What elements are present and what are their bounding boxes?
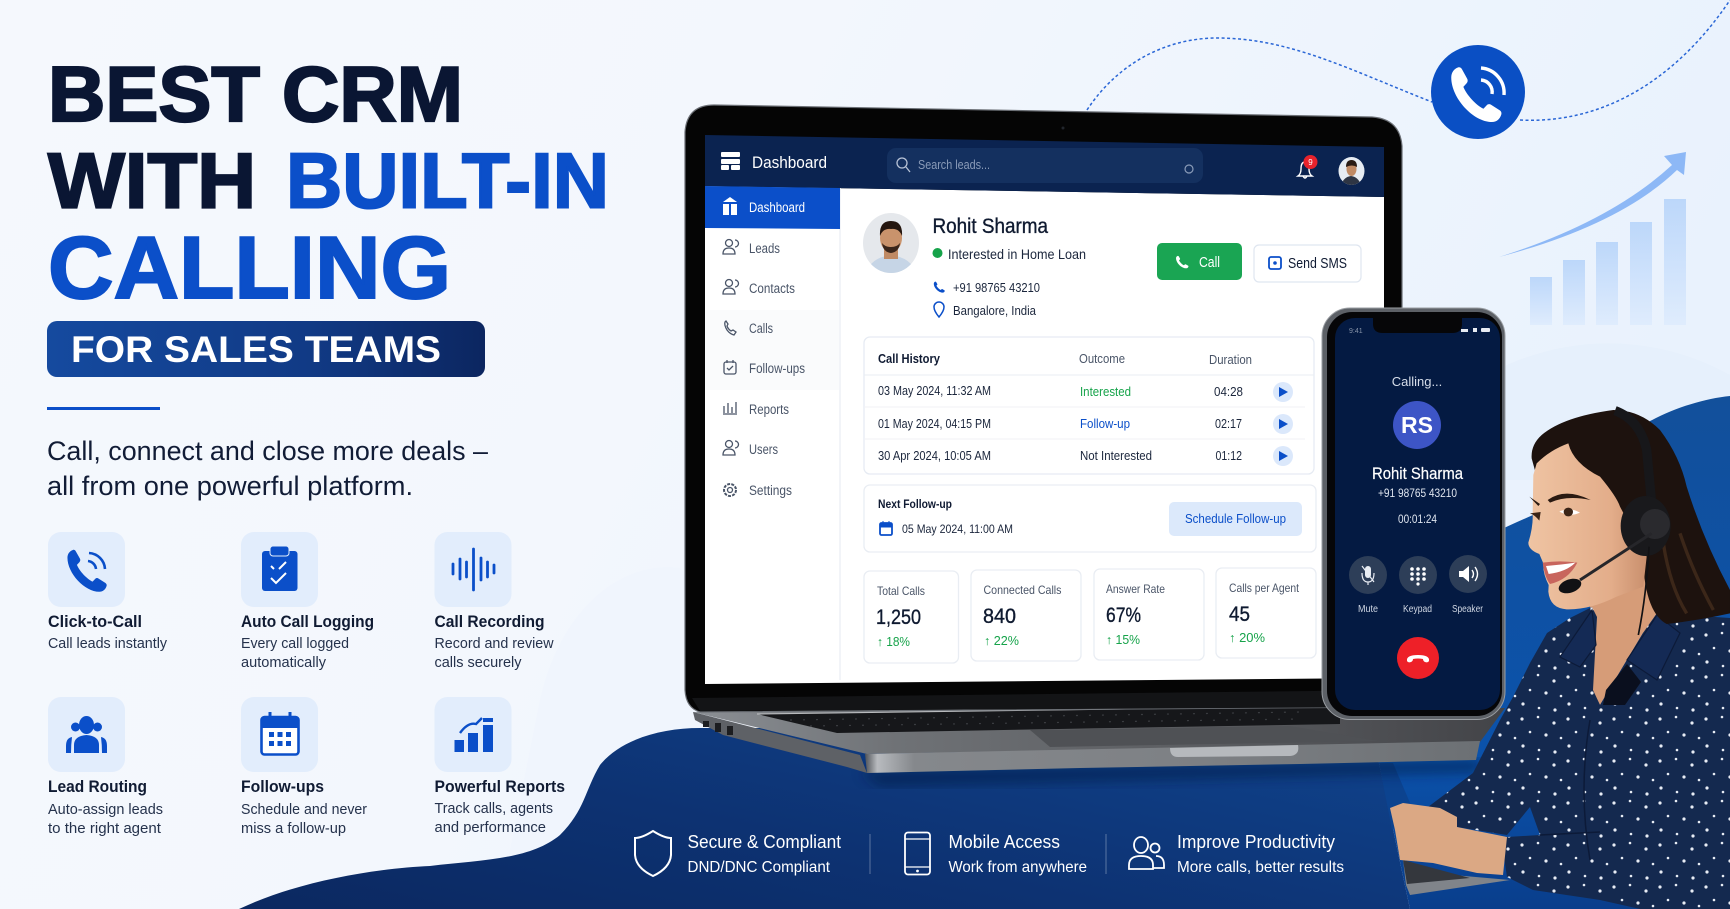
feature: Follow-ups: Follow-ups	[241, 777, 324, 796]
tagline: all from one powerful platform.	[47, 471, 413, 501]
call history table	[864, 337, 1314, 474]
icon: dashboard	[723, 197, 737, 215]
shirt collar and folds	[1540, 610, 1680, 860]
call history table: 01:12	[1216, 449, 1242, 463]
title: BUILT-IN	[286, 136, 609, 224]
laptop deck	[693, 708, 1505, 754]
call history table: Follow-up	[1080, 417, 1130, 431]
feature: Auto Call Logging	[241, 532, 374, 671]
feature: Follow-ups	[241, 697, 367, 837]
user avatar small	[1338, 157, 1365, 186]
sidebar	[705, 186, 840, 680]
sidebar: Calls	[749, 321, 773, 336]
smartphone: 9:41	[1349, 328, 1363, 335]
title: WITH	[48, 136, 256, 224]
smartphone: Calling...	[1392, 374, 1442, 389]
stat card: total calls: Total Calls	[877, 584, 925, 598]
stat card: calls per agent: ↑ 20%	[1229, 631, 1265, 645]
feature: Follow-ups: miss a follow-up	[241, 820, 346, 837]
search bar	[887, 148, 1203, 183]
call history table: Call History	[878, 351, 941, 366]
call history table: 03 May 2024, 11:32 AM	[878, 384, 991, 398]
laptop	[685, 105, 1505, 786]
feature: Click-to-Call	[48, 532, 167, 652]
subtitle pill: FOR SALES TEAMS	[71, 329, 441, 370]
eyebrows, eyes and smile	[1529, 494, 1591, 584]
call button: Call	[1199, 254, 1220, 271]
subtitle pill	[47, 321, 485, 377]
footer benefit: secure and compliant: Secure & Compliant	[688, 832, 841, 852]
app header	[705, 135, 1384, 197]
icon: floating phone badge	[1431, 45, 1525, 139]
send sms button: Send SMS	[1288, 256, 1347, 272]
footer benefit: mobile access	[905, 832, 1087, 876]
agent with headset	[1390, 410, 1730, 909]
sidebar: Leads	[749, 241, 780, 256]
footer benefit: mobile access: Mobile Access	[948, 832, 1060, 852]
footer benefit: improve productivity: Improve Productivity	[1177, 832, 1335, 852]
feature: Auto Call Logging: Auto Call Logging	[241, 612, 374, 631]
tagline: Call, connect and close more deals –	[47, 436, 488, 466]
feature: Call Recording: Call Recording	[434, 612, 544, 631]
laptop: Dashboard	[752, 153, 827, 172]
mute button: Mute	[1358, 604, 1378, 615]
laptop lid	[685, 105, 1402, 712]
next follow-up card: Schedule Follow-up	[1185, 512, 1286, 526]
feature: Follow-ups: Schedule and never	[241, 801, 367, 818]
lead portrait	[863, 213, 919, 275]
footer benefit: mobile access: Work from anywhere	[948, 859, 1087, 876]
sidebar: Contacts	[749, 281, 795, 296]
stat card: total calls: ↑ 18%	[877, 635, 910, 649]
head	[1528, 410, 1730, 635]
wave: light blue panel behind agent	[1379, 396, 1730, 909]
call history table: Interested	[1080, 385, 1131, 399]
lead profile: Interested in Home Loan	[948, 246, 1086, 262]
sidebar: Reports	[749, 402, 789, 417]
smartphone: 00:01:24	[1398, 512, 1437, 526]
search bar: Search leads...	[918, 157, 990, 172]
shirt	[1428, 607, 1730, 909]
feature: Powerful Reports: and performance	[434, 819, 546, 836]
caller initials: RS	[1401, 412, 1433, 438]
keypad button	[1399, 556, 1437, 615]
lead profile: Bangalore, India	[953, 303, 1037, 318]
call button	[1157, 243, 1242, 280]
hand	[1390, 803, 1507, 875]
stat card: calls per agent: Calls per Agent	[1229, 581, 1300, 595]
feature: Lead Routing	[48, 697, 163, 837]
caller initials	[1393, 401, 1441, 449]
stat card: calls per agent	[1216, 568, 1316, 658]
call history table: Outcome	[1079, 352, 1125, 366]
stat card: calls per agent: 45	[1229, 603, 1250, 626]
feature: Call Recording: calls securely	[434, 654, 522, 671]
lead profile	[863, 213, 1086, 318]
speaker button	[1449, 555, 1487, 615]
send sms button	[1254, 245, 1361, 282]
lead profile: +91 98765 43210	[953, 280, 1040, 295]
call history table: 04:28	[1214, 385, 1243, 399]
screen	[705, 186, 1384, 684]
call history table: Not Interested	[1080, 449, 1152, 463]
mute button	[1349, 556, 1387, 615]
title	[48, 50, 609, 317]
smartphone	[1322, 308, 1505, 720]
small laptop under hands	[1403, 860, 1510, 895]
smartphone: +91 98765 43210	[1378, 486, 1457, 500]
sidebar: Dashboard	[749, 200, 805, 215]
footer benefit: secure and compliant: DND/DNC Compliant	[688, 859, 831, 876]
front lip	[865, 741, 1480, 773]
stat card: total calls	[864, 571, 958, 663]
trackpad	[1030, 726, 1378, 747]
feature: Click-to-Call: Call leads instantly	[48, 635, 167, 652]
speaker button: Speaker	[1452, 604, 1484, 615]
smartphone: Rohit Sharma	[1372, 464, 1463, 483]
title: BEST CRM	[48, 50, 463, 138]
call history table: 01 May 2024, 04:15 PM	[878, 417, 991, 431]
headset	[1557, 411, 1671, 635]
hair	[1532, 410, 1730, 624]
feature: Click-to-Call: Click-to-Call	[48, 612, 142, 631]
keyboard	[757, 706, 1340, 733]
face	[1528, 443, 1647, 609]
feature: Lead Routing: to the right agent	[48, 820, 162, 837]
next follow-up card	[864, 485, 1316, 552]
sidebar: Settings	[749, 483, 792, 498]
title: CALLING	[48, 218, 451, 317]
growth arrow	[1499, 152, 1686, 257]
footer benefit: improve productivity	[1129, 832, 1344, 876]
tagline	[47, 436, 488, 501]
stat card: connected calls: ↑ 22%	[984, 634, 1019, 648]
dashed call curve	[1087, 0, 1730, 120]
footer benefit: secure and compliant	[635, 831, 841, 876]
stat card: connected calls: 840	[983, 605, 1016, 628]
stat card: connected calls: Connected Calls	[984, 583, 1062, 597]
feature: Auto Call Logging: automatically	[241, 654, 326, 671]
feature: Powerful Reports: Track calls, agents	[434, 800, 553, 817]
call history table: Duration	[1209, 353, 1252, 367]
next follow-up card: 05 May 2024, 11:00 AM	[902, 522, 1013, 536]
call history table: 30 Apr 2024, 10:05 AM	[878, 449, 991, 463]
stat card: answer rate: Answer Rate	[1106, 582, 1165, 596]
stat card: answer rate: 67%	[1106, 604, 1141, 627]
neck	[1590, 560, 1660, 705]
feature: Lead Routing: Lead Routing	[48, 777, 147, 796]
end call button	[1397, 637, 1439, 679]
icon: menu	[721, 152, 740, 170]
icon: notification bell: 9	[1308, 158, 1313, 167]
wave: dark navy footer	[239, 728, 1410, 909]
sidebar: Users	[749, 442, 778, 457]
sidebar: Follow-ups	[749, 361, 805, 376]
stat card: answer rate	[1094, 569, 1204, 660]
stat card: total calls: 1,250	[876, 606, 921, 629]
feature: Powerful Reports: Powerful Reports	[434, 777, 565, 796]
keypad button: Keypad	[1403, 604, 1432, 615]
feature: Call Recording: Record and review	[434, 635, 554, 652]
next follow-up card: Next Follow-up	[878, 497, 952, 511]
icon: notification bell	[1298, 155, 1318, 178]
stat card: connected calls	[971, 570, 1081, 661]
feature: Call Recording	[434, 532, 554, 671]
call history table: 02:17	[1215, 417, 1242, 431]
footer benefit: improve productivity: More calls, better results	[1177, 859, 1344, 876]
stat card: answer rate: ↑ 15%	[1106, 633, 1140, 647]
feature: Auto Call Logging: Every call logged	[241, 635, 349, 652]
feature: Powerful Reports	[434, 697, 565, 836]
left edge	[693, 712, 867, 773]
lead profile: Rohit Sharma	[932, 215, 1048, 238]
feature: Lead Routing: Auto-assign leads	[48, 801, 163, 818]
growth bar chart	[1530, 199, 1686, 325]
